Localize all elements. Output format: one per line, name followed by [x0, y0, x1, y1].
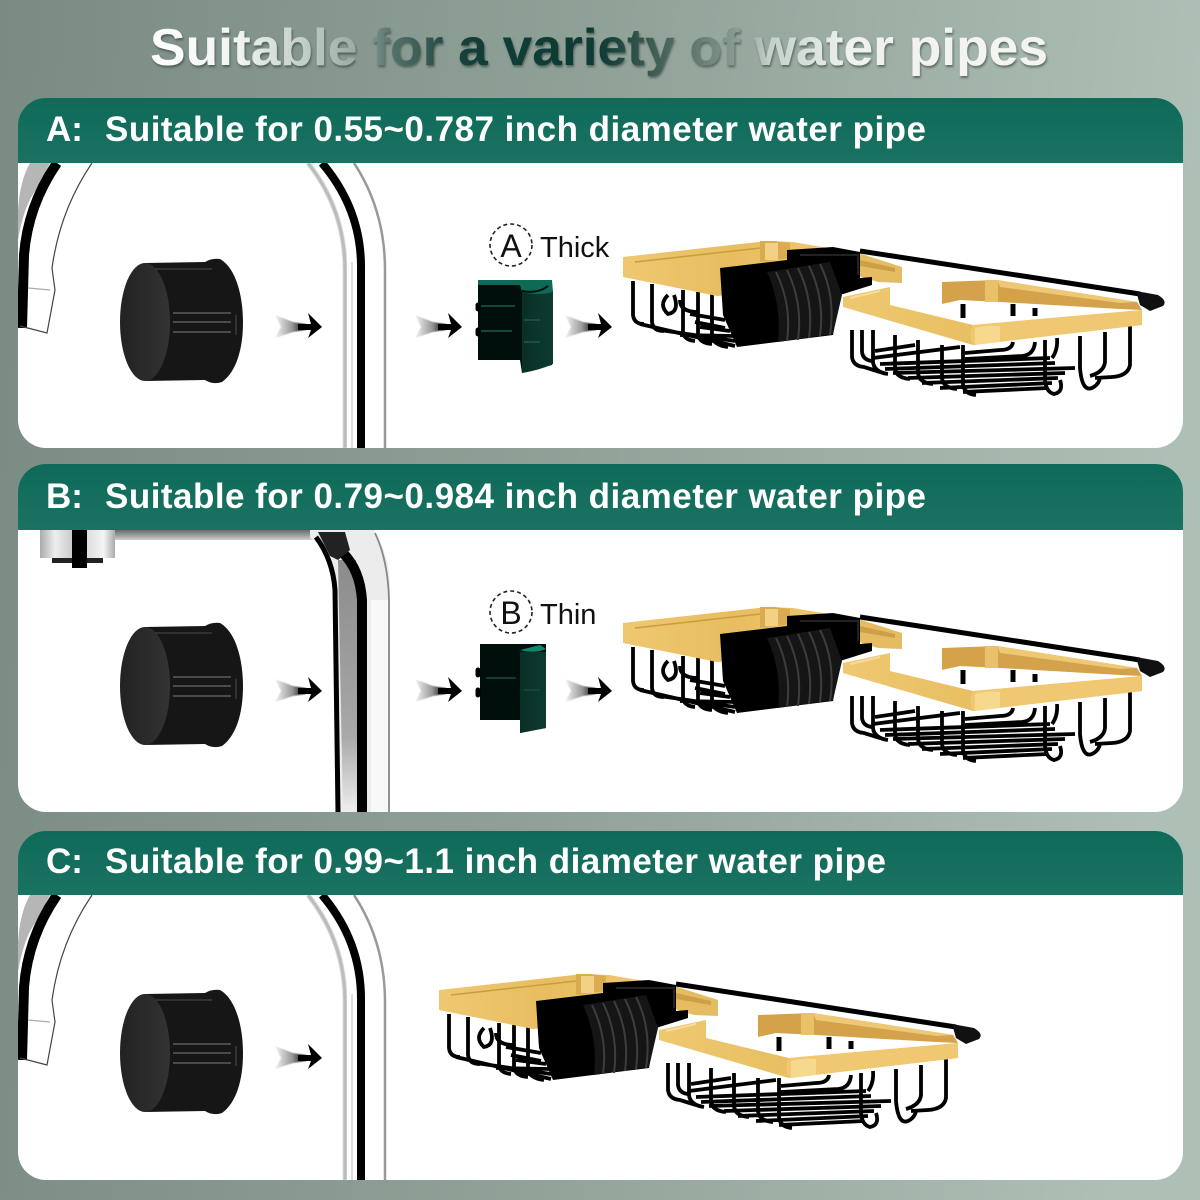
- pipe C: [308, 895, 385, 1180]
- heading C: C:: [46, 842, 83, 881]
- heading A text: Suitable for 0.55~0.787 inch diameter water pipe: [105, 110, 926, 149]
- soap basket A: [623, 241, 1165, 395]
- arrow B3: [565, 677, 612, 702]
- panel: A: [18, 98, 1183, 448]
- soap basket B: [623, 607, 1165, 761]
- heading A: A:: [46, 110, 83, 149]
- spout C: [18, 895, 92, 1065]
- adapter clip A: [478, 280, 553, 373]
- soap basket C: [439, 974, 981, 1128]
- arrow C1: [275, 1044, 322, 1069]
- arrow A2: [415, 313, 462, 338]
- panel B body: [18, 520, 1183, 812]
- panel C header: [18, 831, 1183, 895]
- adapter label B: [490, 591, 596, 633]
- adapter label A: Thick: [540, 232, 610, 264]
- panel: C: [18, 831, 1183, 1180]
- heading C text: Suitable for 0.99~1.1 inch diameter water pipe: [105, 842, 886, 881]
- title: Suitable for a variety of water pipes: [150, 19, 1048, 77]
- panel: B: [18, 464, 1183, 812]
- panel C body: [18, 885, 1183, 1180]
- adapter label B: B: [500, 595, 522, 631]
- knob A: [120, 259, 243, 383]
- arrow B1: [275, 677, 322, 702]
- panel B header: [18, 464, 1183, 530]
- horizontal pipe B: [115, 530, 315, 540]
- faucet C: [18, 895, 385, 1180]
- knob B: [120, 623, 243, 747]
- arrow A1: [275, 313, 322, 338]
- adapter label A: [490, 224, 610, 266]
- arrow B2: [415, 677, 462, 702]
- adapter label B: Thin: [540, 599, 596, 631]
- pipe B: [310, 530, 390, 812]
- adapter label A: A: [500, 228, 522, 264]
- panel A body: [18, 150, 1183, 448]
- adapter clip B: [478, 644, 546, 733]
- aerator B: [40, 530, 115, 568]
- pipe A: [308, 163, 385, 448]
- heading B text: Suitable for 0.79~0.984 inch diameter water pipe: [105, 477, 926, 516]
- spout A: [18, 163, 92, 333]
- faucet A: [18, 163, 385, 448]
- faucet B: [40, 530, 390, 812]
- heading B: B:: [46, 477, 83, 516]
- knob C: [120, 990, 243, 1114]
- panel A header: [18, 98, 1183, 163]
- arrow A3: [565, 313, 612, 338]
